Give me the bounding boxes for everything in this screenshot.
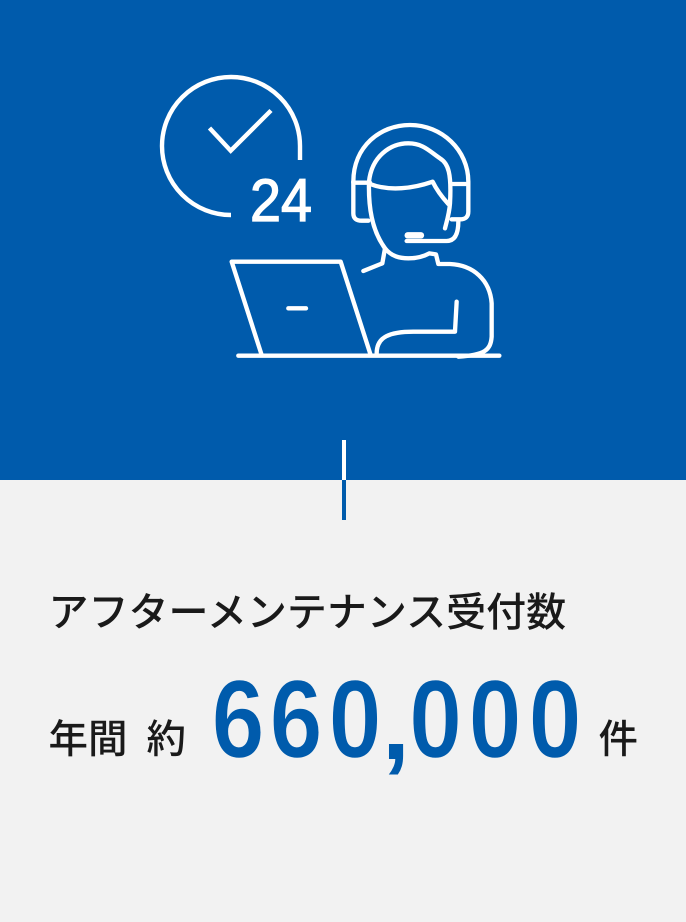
laptop (232, 262, 371, 355)
label: annual: 年間 (48, 718, 128, 762)
figure: 660,000: 0 (468, 660, 522, 781)
heading: アフターメンテナンス受付数 (48, 591, 566, 635)
connector line: white part (342, 440, 346, 480)
figure: 660,000: , (382, 669, 410, 781)
figure: 660,000: 6 (270, 660, 323, 781)
figure: 660,000: 0 (409, 660, 462, 781)
label: 24: 24 (250, 167, 312, 234)
panel: blue header (0, 0, 686, 480)
connector line: blue part (342, 480, 346, 520)
label: approximately: 約 (146, 718, 186, 762)
desk line (238, 349, 499, 362)
operator figure (363, 143, 492, 357)
label: count unit: 件 (598, 718, 638, 762)
icon: operator with headset and laptop (232, 125, 499, 357)
headset (353, 125, 468, 241)
figure: 660,000: 0 (328, 660, 382, 781)
icon: clock with check mark (162, 77, 312, 234)
icon: 24-hour support operator (160, 74, 502, 359)
figure: 660,000 (212, 660, 582, 781)
figure: 660,000: 6 (212, 660, 265, 781)
figure: 660,000: 0 (528, 660, 582, 781)
